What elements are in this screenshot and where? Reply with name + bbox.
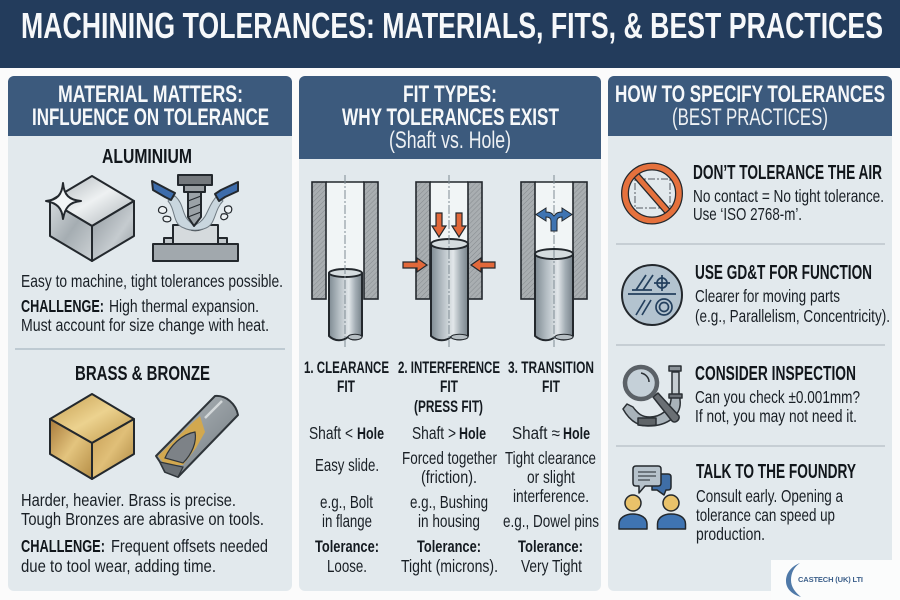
column: interference fit: e.g., Bushing <box>410 492 488 512</box>
subheading: brass and bronze: BRASS & BRONZE <box>75 362 210 385</box>
logo: Castech: CASTECH (UK) LTI <box>798 575 863 584</box>
text: aluminium description: CHALLENGE: <box>21 296 104 316</box>
icon: brass block <box>50 394 134 479</box>
text: don't tolerance the air: Use ‘ISO 2768-m’. <box>693 204 802 224</box>
text: brass description: Harder, heavier. Brass is precise. <box>21 490 236 510</box>
arrow: either way <box>536 208 572 231</box>
column: transition fit: FIT <box>542 377 560 396</box>
column: clearance fit: Tolerance: <box>315 537 379 556</box>
text: brass description: due to tool wear, adding time. <box>21 556 216 576</box>
column: transition fit: interference. <box>513 486 589 506</box>
column: transition fit: Tolerance: <box>518 537 583 556</box>
icon: worn cutting tool <box>156 396 238 477</box>
panel: best practices <box>608 76 892 591</box>
arrows: press force <box>403 213 495 272</box>
icon: no air tolerance <box>625 166 679 220</box>
text: aluminium description: Must account for size change with heat. <box>21 315 269 335</box>
column: interference fit: Shaft > <box>412 423 456 443</box>
column: interference fit: (PRESS FIT) <box>414 397 483 416</box>
column: clearance fit: e.g., Bolt <box>320 492 373 512</box>
heading: material matters <box>32 81 269 131</box>
logo: Castech <box>771 560 900 600</box>
text: brass description: CHALLENGE: <box>21 536 105 556</box>
text: talk to the foundry: Consult early. Opening a <box>696 486 843 506</box>
column: transition fit: 3. TRANSITION <box>508 358 594 377</box>
text: aluminium description: High thermal expansion. <box>109 296 259 316</box>
column: clearance fit: FIT <box>337 377 355 396</box>
heading: fit types: FIT TYPES: <box>403 81 497 108</box>
text: consider inspection <box>695 362 860 426</box>
column: clearance fit <box>304 358 389 576</box>
column: transition fit: Very Tight <box>521 556 582 576</box>
column: transition fit: Hole <box>563 424 590 443</box>
icon: milling with coolant <box>152 175 238 261</box>
text: talk to the foundry <box>696 460 856 544</box>
text: brass description: Frequent offsets needed <box>111 536 268 556</box>
heading: fit types: (Shaft vs. Hole) <box>389 127 511 154</box>
icon: two people talking <box>619 466 686 529</box>
heading: fit types: WHY TOLERANCES EXIST <box>342 104 559 131</box>
column: clearance fit: Loose. <box>327 556 367 576</box>
column: interference fit: Forced together <box>402 448 497 468</box>
column: transition fit: e.g., Dowel pins <box>503 511 599 531</box>
text: talk to the foundry: production. <box>696 524 765 544</box>
heading: fit types <box>342 81 559 154</box>
text: use GD&T: Clearer for moving parts <box>695 286 840 306</box>
heading: material matters: MATERIAL MATTERS: <box>58 81 243 108</box>
icon: GD&T symbols <box>622 265 682 325</box>
column: interference fit: in housing <box>418 511 480 531</box>
column: interference fit: FIT <box>440 377 458 396</box>
column: interference fit: Tolerance: <box>417 537 481 556</box>
heading: material matters: INFLUENCE ON TOLERANCE <box>32 104 269 131</box>
text: consider inspection: If not, you may not need it. <box>695 406 857 426</box>
icon: inspection magnifier and micrometer <box>623 366 682 426</box>
diagram: clearance fit <box>312 175 378 347</box>
subheading: aluminium: ALUMINIUM <box>102 145 192 168</box>
column: interference fit: 2. INTERFERENCE <box>398 358 500 377</box>
text: aluminium description <box>21 271 283 335</box>
title banner <box>0 0 900 68</box>
panel: material matters <box>8 76 292 591</box>
column: transition fit: or slight <box>527 467 575 487</box>
icon: aluminium block <box>46 176 134 261</box>
column: clearance fit: Shaft < <box>309 423 353 443</box>
column: interference fit: (friction). <box>421 467 477 487</box>
column: interference fit <box>398 358 500 576</box>
text: aluminium description: Easy to machine, tight tolerances possible. <box>21 271 283 291</box>
column: interference fit: Hole <box>459 424 486 443</box>
panel: fit types <box>299 76 601 591</box>
heading: how to specify tolerances <box>615 81 885 131</box>
heading: how to specify tolerances: (BEST PRACTICES) <box>672 104 828 131</box>
text: don't tolerance the air <box>693 161 884 224</box>
diagram: transition fit <box>521 175 587 347</box>
diagram: interference fit <box>403 175 495 347</box>
text: brass description <box>21 490 268 576</box>
column: transition fit: Shaft ≈ <box>512 423 560 443</box>
column: clearance fit: Easy slide. <box>315 455 379 475</box>
column: transition fit: Tight clearance <box>505 448 596 468</box>
column: clearance fit: in flange <box>322 511 372 531</box>
text: brass description: Tough Bronzes are abrasive on tools. <box>21 509 264 529</box>
column: transition fit <box>503 358 599 576</box>
text: use GD&T <box>695 261 890 326</box>
text: talk to the foundry: tolerance can speed up <box>696 505 835 525</box>
column: clearance fit: 1. CLEARANCE <box>304 358 389 377</box>
column: clearance fit: Hole <box>357 424 384 443</box>
column: interference fit: Tight (microns). <box>401 556 498 576</box>
